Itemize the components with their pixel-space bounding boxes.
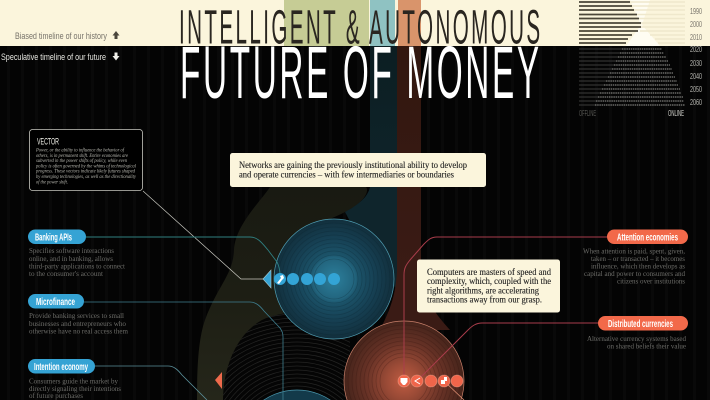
connector: attention economies bbox=[404, 237, 607, 376]
panel: distributed currencies: on shared beliefs their value bbox=[607, 342, 687, 350]
red network circle bbox=[344, 321, 464, 400]
icon: up arrow bbox=[112, 31, 120, 39]
panel: microfinance bbox=[28, 294, 128, 336]
panel: banking APIs: to the consumer's account bbox=[29, 269, 104, 278]
title: INTELLIGENT & AUTONOMOUS bbox=[179, 1, 540, 54]
panel: attention economies: capital and power to consumers and bbox=[584, 269, 685, 278]
connector: lower red bbox=[444, 381, 464, 400]
panel: vector: Power, or the ability to influence the behavior of bbox=[35, 148, 125, 154]
red marker triangle bbox=[215, 372, 222, 389]
red glow around stripe bbox=[380, 270, 450, 330]
panel: intention economy bbox=[28, 359, 121, 400]
callout: computers: transactions away from our grasp. bbox=[427, 294, 542, 304]
panel: attention economies: When attention is paid, spent, given, bbox=[583, 246, 685, 256]
callout: networks: and operate currencies – with few intermediaries or boundaries bbox=[239, 170, 454, 180]
panel: microfinance: Provide banking services to small bbox=[29, 311, 124, 320]
icon: badge bbox=[400, 378, 408, 385]
panel: distributed currencies bbox=[587, 316, 688, 350]
callout: computers: complexity, which, coupled with the bbox=[427, 276, 551, 286]
panel: vector: by emerging technologies, as well as the directionality bbox=[36, 175, 137, 180]
panel: attention economies: citizens over institutions bbox=[617, 276, 685, 286]
panel: intention economy: directly signaling their intentions bbox=[29, 384, 121, 393]
panel: intention economy: of future purchases bbox=[29, 391, 83, 400]
panel: microfinance: businesses and entrepreneurs who bbox=[29, 319, 126, 328]
panel: vector: policy is often governed by the whims of technological bbox=[35, 164, 137, 170]
panel: banking APIs: Specifies software interactions bbox=[29, 246, 114, 255]
year labels: 2010 bbox=[690, 33, 702, 42]
background: cream history section bbox=[0, 0, 710, 46]
panel: vector: subverted in the power shifts of policy, while even bbox=[36, 159, 127, 164]
panel: attention economies: taken – or transacted – it becomes bbox=[591, 254, 685, 263]
icon: exchange bbox=[441, 377, 447, 384]
year labels bbox=[690, 7, 702, 107]
chart: offline vs online bbox=[579, 0, 702, 118]
panel: intention economy: Intention economy bbox=[34, 362, 88, 373]
panel: microfinance: otherwise have no real access them bbox=[29, 326, 128, 336]
year labels: 2040 bbox=[690, 72, 702, 81]
olive network blob bbox=[197, 187, 367, 400]
year labels: 1990 bbox=[690, 7, 702, 16]
year labels: 2020 bbox=[690, 45, 702, 54]
callout: computers: right algorithms, are accelerating bbox=[427, 286, 539, 296]
blue network circle bbox=[274, 219, 394, 339]
legend: future: Speculative timeline of our future bbox=[1, 52, 106, 63]
panel: banking APIs: online, and in banking, allows bbox=[29, 254, 113, 263]
offline label: OFFLINE bbox=[579, 109, 596, 118]
year labels: 2030 bbox=[690, 59, 702, 68]
icon: wrench bbox=[277, 275, 284, 284]
colour stripes bbox=[284, 0, 421, 331]
blue glow beneath stripe bbox=[345, 187, 397, 290]
panel: attention economies bbox=[583, 230, 688, 286]
callout: computers: Computers are masters of speed and bbox=[427, 267, 551, 277]
callout: computers bbox=[417, 260, 560, 312]
panel: vector: of the power shift. bbox=[36, 180, 68, 186]
callout: networks bbox=[230, 153, 486, 187]
connector: microfinance bbox=[84, 302, 283, 400]
connector: vector bbox=[143, 191, 264, 279]
blue node dots bbox=[274, 273, 340, 285]
online label: ONLINE bbox=[668, 109, 684, 118]
panel: banking APIs: Banking APIs bbox=[35, 232, 72, 244]
panel: intention economy: Consumers guide the market by bbox=[29, 376, 118, 386]
title: FUTURE OF MONEY bbox=[180, 32, 539, 115]
panel: vector: VECTOR bbox=[37, 136, 59, 148]
panel: microfinance: Microfinance bbox=[36, 297, 75, 308]
black ringed disc bbox=[223, 314, 350, 400]
year labels: 2000 bbox=[690, 20, 702, 29]
legend: history: Biased timeline of our history bbox=[15, 31, 107, 42]
year labels: 2060 bbox=[690, 98, 702, 107]
year labels: 2050 bbox=[690, 85, 702, 94]
blue marker triangle bbox=[263, 270, 271, 288]
connector: intention economy bbox=[95, 366, 207, 400]
panel: vector: others, is in permanent shift. Entire economies are bbox=[36, 154, 129, 159]
connector: banking APIs bbox=[86, 237, 280, 275]
red node dots bbox=[398, 375, 463, 387]
panel: vector: progress. These vectors indicate likely futures shaped bbox=[35, 170, 135, 174]
icon: share bbox=[415, 378, 420, 384]
callout: networks: Networks are gaining the previously institutional ability to develop bbox=[239, 160, 467, 170]
connector: distributed currencies bbox=[417, 323, 598, 381]
bottom blue circle bbox=[237, 390, 357, 400]
panel: banking APIs: third-party applications to connect bbox=[29, 262, 126, 270]
panel: attention economies: influence, which then develops as bbox=[591, 262, 685, 270]
panel: banking APIs bbox=[28, 230, 126, 278]
panel: vector bbox=[30, 130, 142, 190]
panel: distributed currencies: Alternative currency systems based bbox=[587, 334, 686, 343]
icon: down arrow bbox=[112, 52, 120, 60]
